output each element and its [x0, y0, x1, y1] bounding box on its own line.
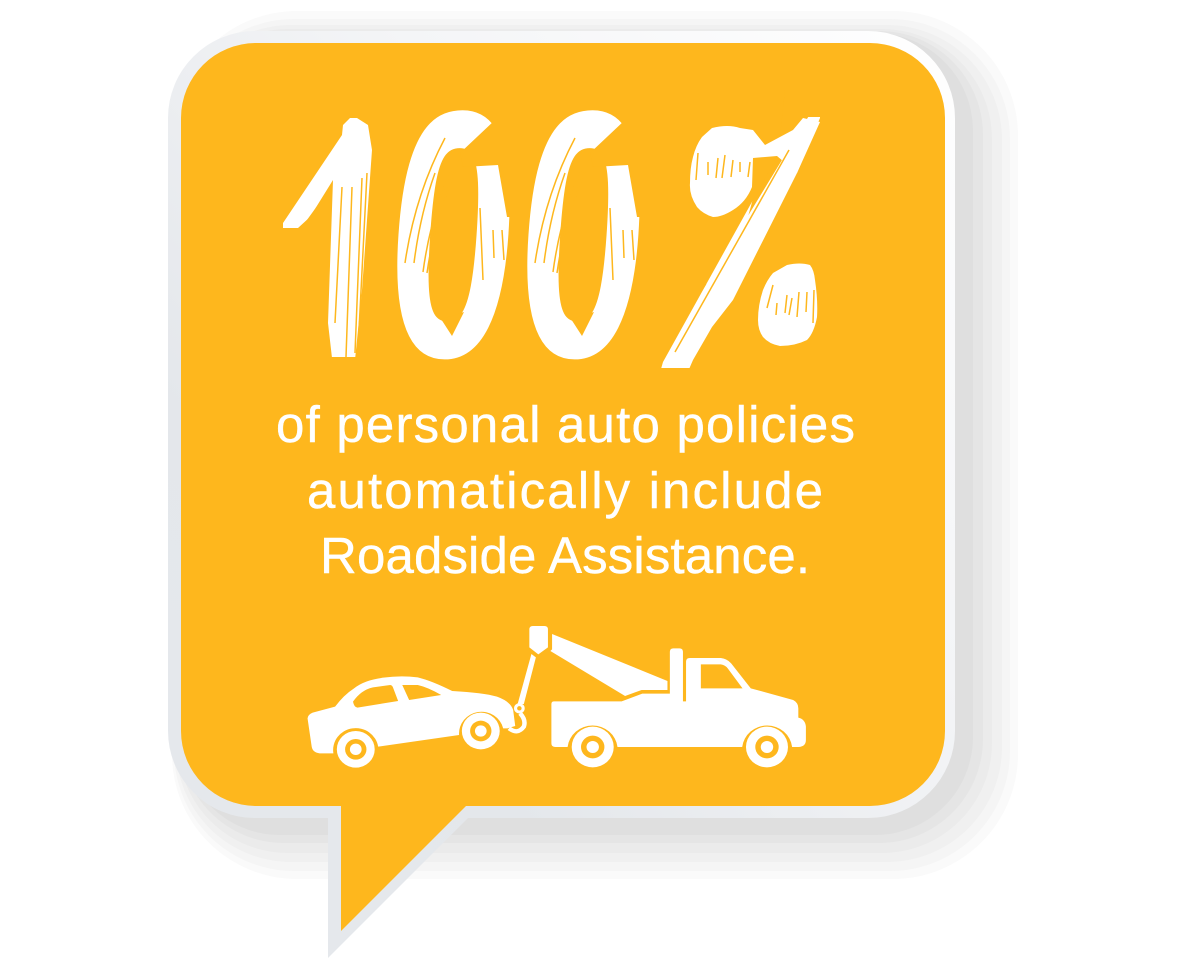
headline: 100%: [225, 0, 883, 505]
layered drop shadow: [172, 11, 1018, 879]
icon: tow truck pulling car: [308, 626, 806, 768]
headline: 100%: %: [614, 50, 883, 441]
headline: 100%: 0: [376, 39, 531, 432]
car body: [308, 676, 515, 753]
car wheels: [337, 713, 500, 768]
speech bubble border: [168, 31, 955, 958]
pulley block: [529, 626, 548, 654]
body text: Roadside Assistance.: [320, 527, 810, 584]
body text: automatically include: [307, 462, 823, 519]
speech bubble panel: [181, 43, 945, 931]
truck wheels: [572, 727, 788, 767]
truck window: [701, 664, 743, 688]
car windows: [353, 685, 441, 708]
headline: 100%: 1: [251, 0, 430, 505]
truck body: [551, 648, 806, 747]
tow hook and arm: [509, 654, 536, 731]
headline: 100%: 0: [506, 39, 661, 432]
tow boom: [550, 634, 667, 696]
body text: [276, 396, 855, 584]
body text: of personal auto policies: [276, 396, 855, 453]
